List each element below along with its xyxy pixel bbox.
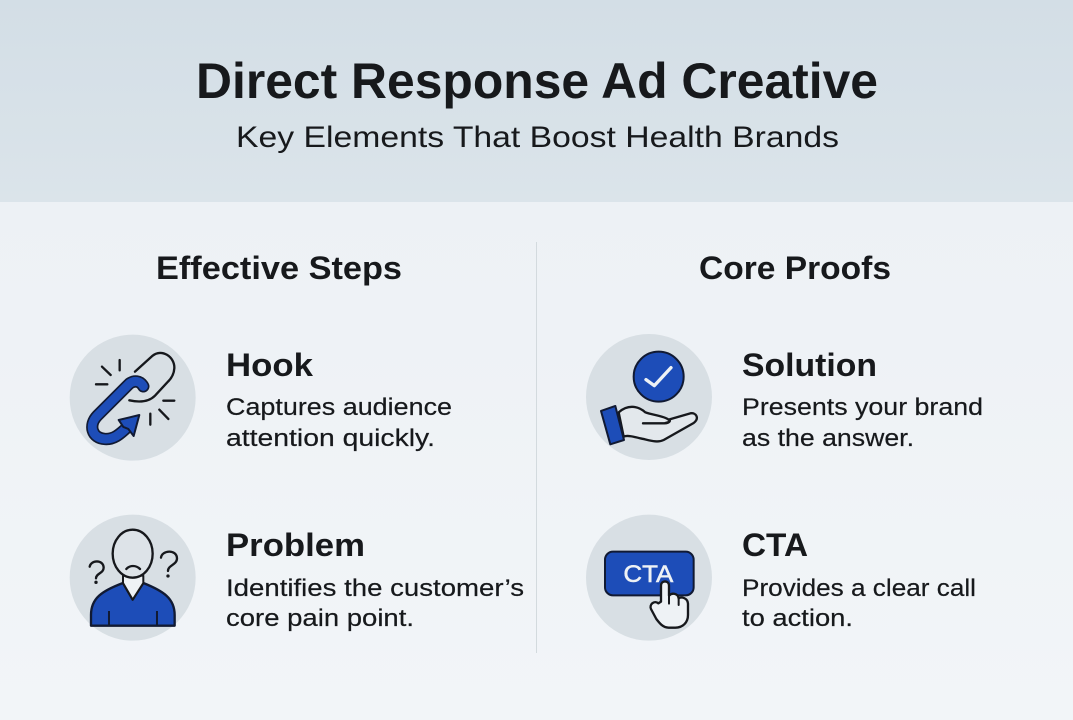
description: problem: Identifies the customer’s xyxy=(226,575,524,602)
description: hook: Captures audience xyxy=(226,394,452,421)
icon: CTA button with pointer xyxy=(586,515,712,641)
icon: confused person xyxy=(70,515,196,641)
panel: effective steps xyxy=(70,250,524,641)
proof: solution xyxy=(586,334,983,460)
icon: broken chain link with arrow xyxy=(70,335,196,461)
heading: core proofs: Core Proofs xyxy=(699,250,891,286)
label: hook: Hook xyxy=(226,347,313,383)
description: cta: Provides a clear call xyxy=(742,575,976,602)
icon: CTA button with pointer: CTA xyxy=(623,561,673,588)
label: cta: CTA xyxy=(742,527,808,563)
label: solution: Solution xyxy=(742,347,877,383)
header band xyxy=(0,0,1073,202)
description: solution: Presents your brand xyxy=(742,394,983,421)
heading: effective steps: Effective Steps xyxy=(156,250,402,286)
proof: cta: to action. xyxy=(742,605,853,632)
proof: cta xyxy=(586,515,976,641)
step: problem xyxy=(70,515,524,641)
icon: hand with checkmark xyxy=(586,334,712,460)
panel: core proofs xyxy=(586,250,983,641)
label: problem: Problem xyxy=(226,527,365,563)
proof: solution: as the answer. xyxy=(742,425,914,452)
subtitle: Key Elements That Boost Health Brands xyxy=(236,121,839,154)
title: Direct Response Ad Creative xyxy=(196,53,878,109)
step: hook xyxy=(70,335,452,461)
step: problem: core pain point. xyxy=(226,605,414,632)
step: hook: attention quickly. xyxy=(226,425,435,452)
